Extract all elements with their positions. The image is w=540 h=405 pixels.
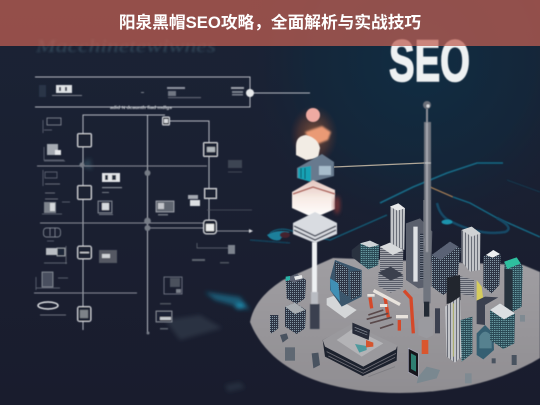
blue arch building	[477, 325, 494, 359]
far-left block	[270, 315, 278, 333]
horizontal branch lines	[34, 166, 250, 293]
schematic flow diagram	[34, 77, 310, 334]
trunk nodes	[80, 162, 151, 334]
teal block	[352, 241, 379, 269]
street billboard	[408, 348, 418, 377]
vertical trunk lines	[83, 115, 209, 333]
title banner	[0, 0, 540, 46]
grey-blue block	[432, 242, 474, 297]
central stage	[323, 323, 397, 376]
arrow head	[249, 229, 253, 233]
middle column icons	[98, 160, 252, 330]
blue billboard complex	[327, 260, 362, 318]
disc surface marks	[368, 367, 395, 377]
striped platform	[293, 212, 337, 243]
left column icons	[36, 118, 70, 315]
stepped bench	[367, 310, 393, 328]
city buildings	[270, 200, 525, 383]
title text: 阳泉黑帽SEO攻略，全面解析与实战技巧	[119, 13, 421, 32]
stacked block	[378, 243, 403, 293]
box inner marks	[80, 119, 215, 318]
big SEO lettering: SEO	[389, 29, 470, 94]
glowing beacon tower	[290, 105, 424, 329]
small figures and props	[280, 315, 525, 383]
left dark building	[286, 274, 306, 304]
white dome	[296, 135, 320, 160]
pink light orb	[306, 108, 320, 122]
grey tower right	[483, 250, 501, 293]
central mast	[418, 200, 433, 354]
red pipes and steps	[370, 291, 413, 333]
back tower	[462, 227, 481, 272]
tall striped tower	[390, 203, 405, 250]
striped skyscraper	[445, 275, 472, 363]
square node boxes	[78, 117, 218, 322]
faded background heading: Macchinetewiwnes	[35, 36, 216, 56]
connector to central mast	[334, 163, 424, 167]
central mast upper part	[423, 101, 431, 252]
tower pole and base	[310, 242, 320, 329]
background light streaks	[80, 158, 540, 392]
orange block	[305, 126, 331, 146]
red side glow	[334, 196, 340, 214]
city disc platform	[250, 258, 540, 393]
top frame lines	[35, 77, 310, 107]
green-top tower	[504, 257, 523, 312]
yellow sign tower	[477, 280, 498, 325]
white cube	[292, 180, 335, 218]
lower-left dark building	[285, 303, 306, 334]
central dark tower	[406, 218, 432, 288]
pipe caps	[367, 289, 408, 318]
teal server block	[297, 154, 334, 182]
dark slab	[435, 308, 440, 333]
top frame node	[246, 89, 254, 97]
orange glow	[290, 105, 338, 165]
frame caption: adid N dcaunth fiad mdlgs	[110, 105, 173, 110]
top frame contents	[39, 85, 244, 98]
white-top teal block	[490, 303, 515, 349]
